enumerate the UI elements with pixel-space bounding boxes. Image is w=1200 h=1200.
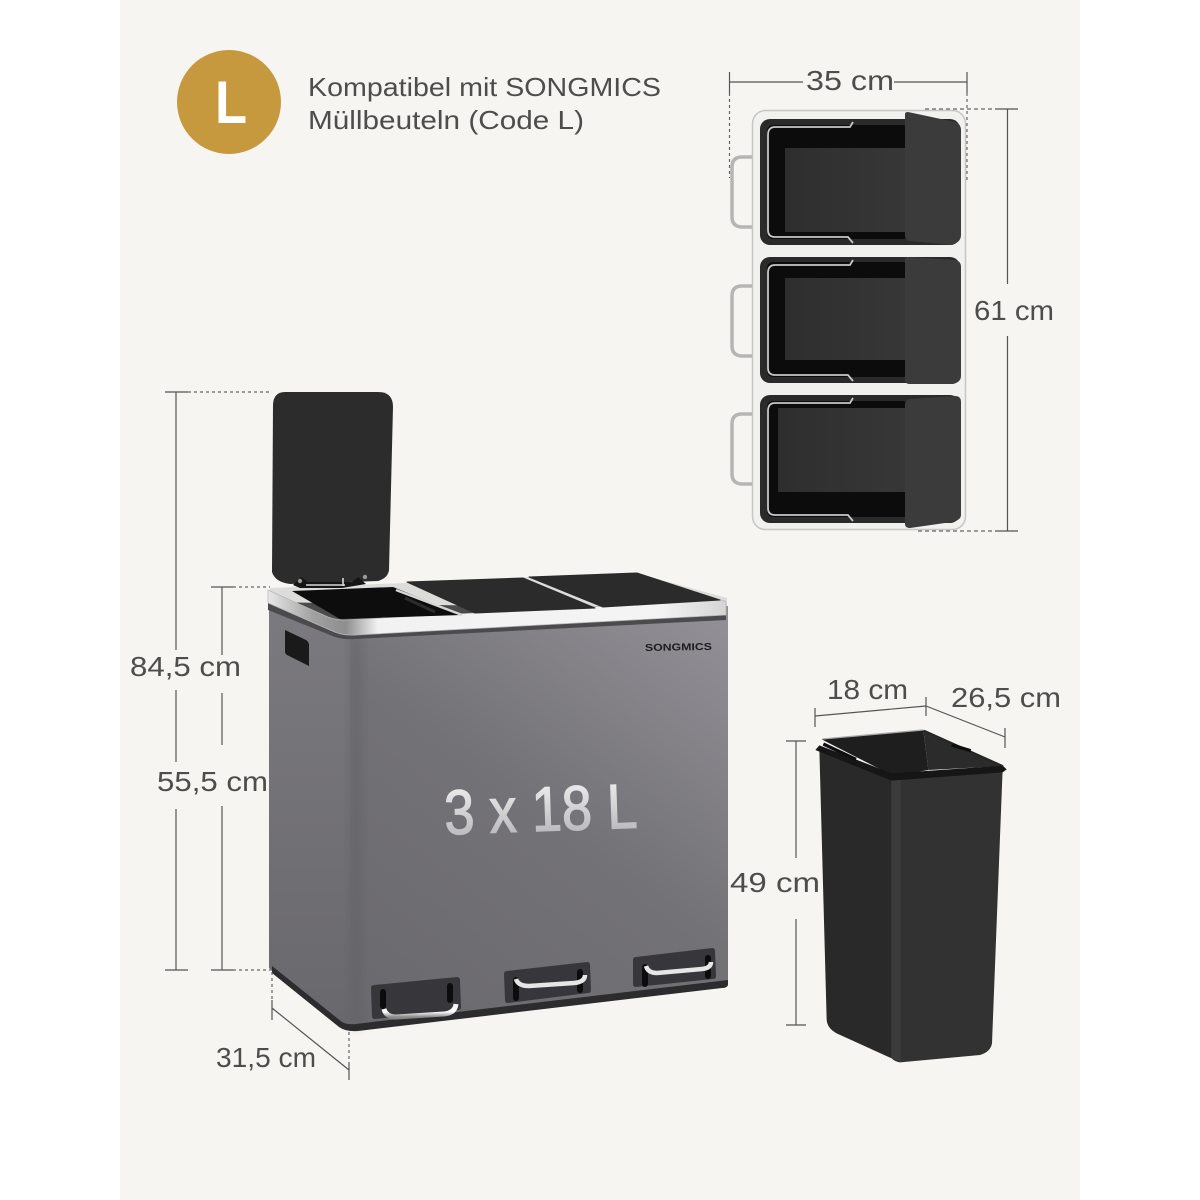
badge: code L <box>177 50 281 154</box>
dimension: 18 cm: 18 cm <box>827 674 908 705</box>
silver rim <box>268 590 726 635</box>
top view of inner bins <box>732 110 966 530</box>
front face <box>892 768 1003 1062</box>
handles <box>732 157 752 484</box>
dimension: 61 cm: 61 cm <box>974 295 1054 326</box>
background panel <box>120 0 1080 1200</box>
text: bag compatibility note: Müllbeuteln (Code L) <box>308 105 584 135</box>
base strip <box>272 966 728 1031</box>
inner bin: removable bucket <box>815 730 1007 1062</box>
top deck <box>268 573 727 628</box>
closed lid 3 <box>529 573 720 607</box>
corner highlight <box>892 778 901 1062</box>
tray frame <box>752 110 966 530</box>
bin 2 <box>760 257 961 384</box>
dimension: 26,5 cm: 26,5 cm <box>951 682 1061 713</box>
dimension: 49 cm: 49 cm <box>730 867 820 898</box>
main bin: three-compartment pedal bin <box>268 392 728 1031</box>
interior walls <box>822 730 928 776</box>
bin 1 <box>760 112 961 245</box>
closed lid 2 <box>407 578 595 613</box>
dimension: 84,5 cm <box>130 392 272 970</box>
capacity label: 3 x 18 L <box>443 772 638 848</box>
dimension: 35 cm <box>730 65 967 180</box>
text: bag compatibility note: Kompatibel mit SONGMICS <box>308 72 661 102</box>
dimension: 55,5 cm: 55,5 cm <box>157 766 268 797</box>
open compartment <box>292 587 462 619</box>
soft corner shading <box>350 636 362 1026</box>
dark band under rim <box>268 602 726 639</box>
open lid <box>272 392 393 584</box>
dimension: 55,5 cm <box>157 587 272 970</box>
side grip <box>285 630 309 666</box>
dimension: 26,5 cm <box>926 682 1061 748</box>
bin 3 <box>760 395 961 528</box>
hinge <box>293 575 367 588</box>
badge: code L: L <box>215 69 247 136</box>
dimension: 31,5 cm: 31,5 cm <box>216 1042 316 1073</box>
dimension: 18 cm <box>815 674 926 727</box>
dimension: 49 cm <box>730 741 820 1025</box>
dimension: 35 cm: 35 cm <box>806 65 894 96</box>
dimension: 61 cm <box>918 109 1054 531</box>
dimension: 84,5 cm: 84,5 cm <box>130 651 241 682</box>
brand logo: SONGMICS <box>645 642 712 654</box>
dimension: 31,5 cm <box>216 972 349 1080</box>
pedals <box>371 948 716 1019</box>
rim <box>815 745 1007 781</box>
side face <box>819 748 892 1058</box>
text: bag compatibility note <box>308 72 661 135</box>
body front and side <box>269 600 728 1029</box>
